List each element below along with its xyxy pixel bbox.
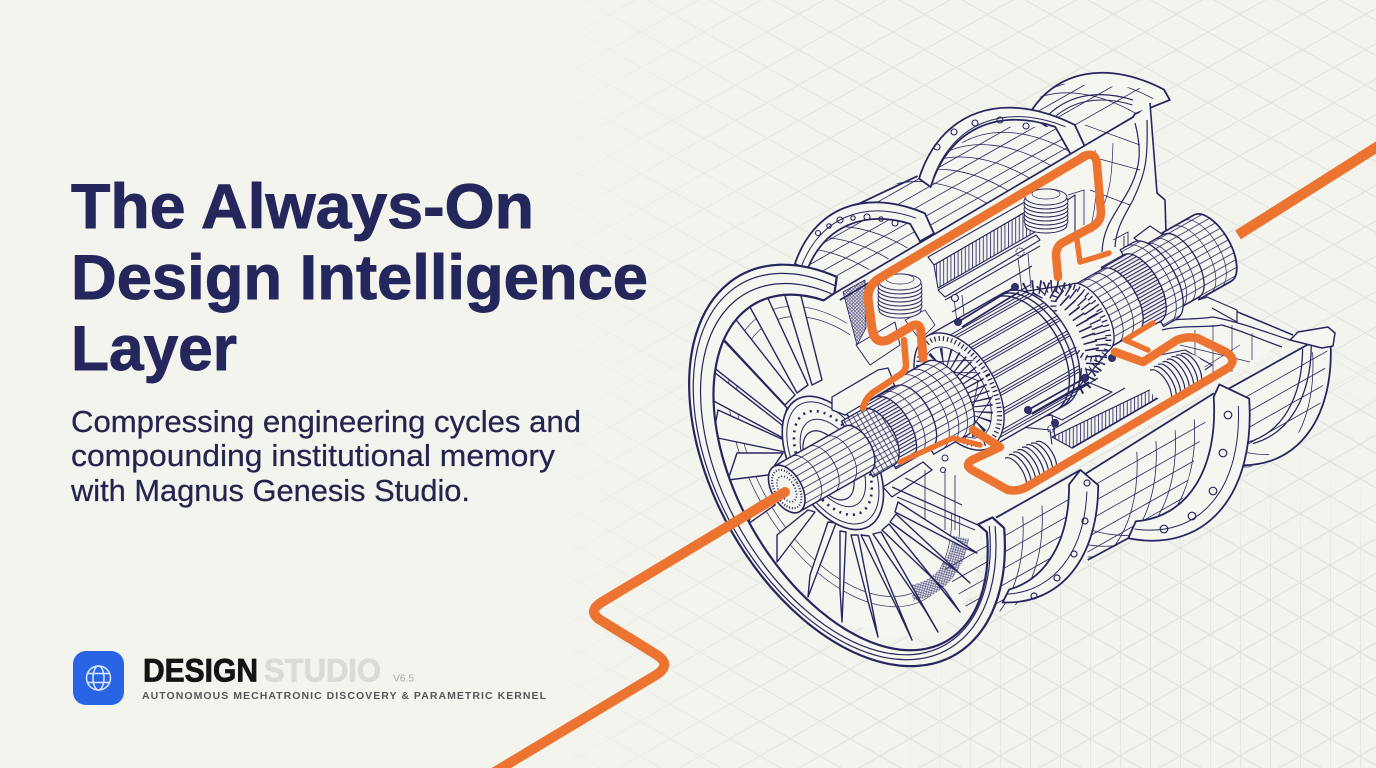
orange coolant loop: upper [863, 155, 1109, 408]
wordmark: STUDIO [264, 652, 381, 688]
version label: V6.5 [393, 672, 414, 684]
orange coolant loop: lower [900, 323, 1233, 490]
lower stator block [1000, 350, 1212, 448]
title [71, 172, 648, 384]
wordmark: DESIGN [143, 652, 258, 688]
tagline: AUTONOMOUS MECHATRONIC DISCOVERY & PARAMETRIC KERNEL [142, 690, 547, 702]
engine cutaway illustration [624, 33, 1376, 721]
interior cavity [832, 103, 1293, 523]
orange line: lower-left feed into shaft nose [493, 492, 785, 768]
flange bolts: front [816, 214, 898, 236]
hub bracket and lower plate [832, 322, 978, 530]
rear end wall [1085, 103, 1166, 252]
subtitle [70, 405, 581, 508]
title: Layer [71, 314, 237, 384]
subtitle: Compressing engineering cycles and [71, 405, 581, 439]
subtitle: compounding institutional memory [71, 439, 556, 473]
hub bearing disc [761, 379, 905, 547]
flange bolts: rear [934, 117, 1029, 150]
shaft nose cap [761, 459, 813, 519]
subtitle: with Magnus Genesis Studio. [70, 474, 470, 508]
lower inner wall [1157, 297, 1293, 392]
logo lockup [73, 651, 547, 705]
coil: lower left [995, 432, 1068, 498]
front shaft stages [753, 352, 986, 533]
coil: upper left [878, 274, 922, 318]
front upper drum and flange [794, 201, 935, 276]
flange bolts: front lower [1031, 480, 1090, 599]
flange bolts: middle lower [1160, 411, 1232, 533]
rotor front bevel gear [920, 339, 1005, 440]
rear lower flange end block [1290, 327, 1335, 348]
icon: blue globe badge [73, 651, 124, 705]
middle upper drum and flange [858, 106, 1085, 233]
rotor core [895, 275, 1099, 465]
coil: lower right [1140, 344, 1213, 410]
orange line: upper-right exit [1238, 145, 1376, 235]
lower drum: middle segment [1085, 384, 1251, 561]
isometric blueprint grid [630, 0, 1376, 768]
rear shaft [1068, 201, 1250, 356]
title: Design Intelligence [71, 243, 648, 313]
upper cut edge [835, 117, 1133, 300]
rear lower casing [1228, 344, 1332, 468]
fan blades [708, 289, 977, 640]
rear upper casing [1032, 72, 1171, 142]
inner guide rings [681, 267, 1008, 646]
front ring interior [647, 232, 1038, 683]
wordmark [143, 652, 381, 688]
front ring band [624, 224, 1047, 721]
rotor rear bevel gear [994, 255, 1136, 409]
title: The Always-On [71, 172, 534, 242]
dotted packing left of coil [843, 280, 866, 345]
stator rails and clamps beside rotor [954, 284, 1116, 426]
lower drum: front segment [945, 469, 1100, 612]
coil: upper right [1024, 189, 1068, 233]
upper stator block [905, 190, 1084, 340]
